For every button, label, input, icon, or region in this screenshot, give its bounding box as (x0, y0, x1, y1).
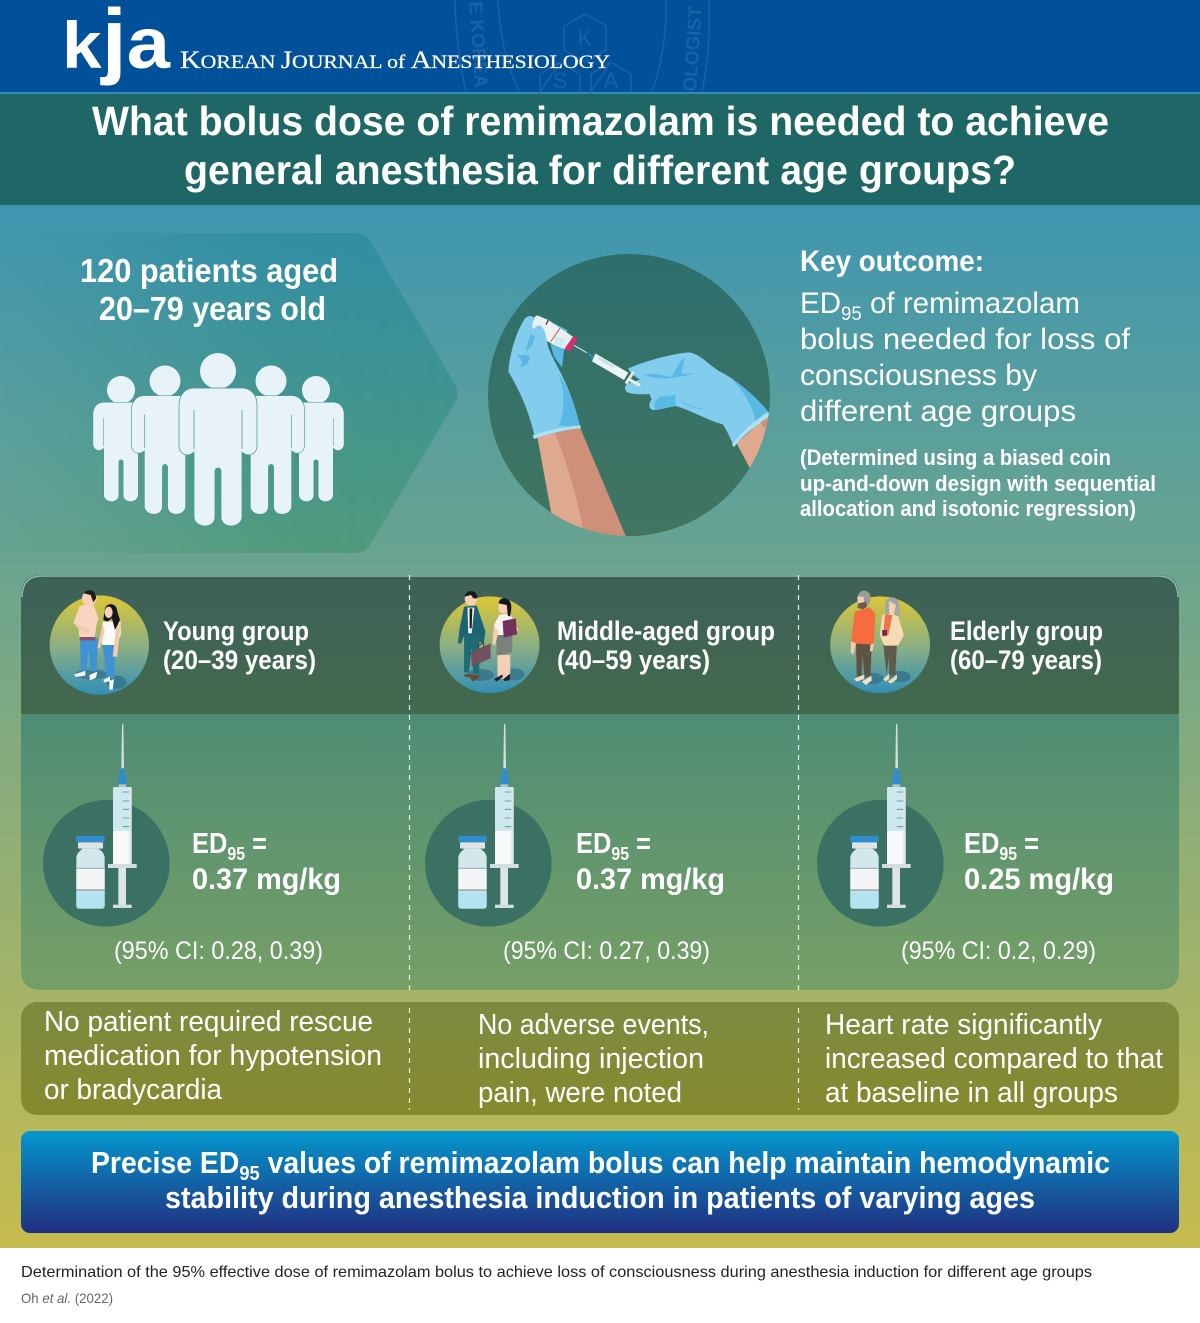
elderly group label (950, 616, 1103, 675)
dose value: ED (576, 828, 616, 860)
icon: vial and syringe (817, 723, 944, 927)
outcome description: of remimazolam (862, 287, 1080, 320)
right forearm (736, 414, 769, 468)
text block: key outcome (800, 245, 1156, 521)
elderly group result (817, 723, 1114, 965)
back fingers of left hand (551, 323, 567, 367)
middle-aged group label: Middle-aged group (557, 616, 775, 646)
middle-aged group header (440, 591, 775, 693)
dose value (964, 828, 1114, 896)
left forearm (537, 427, 627, 538)
icon: group of people (93, 353, 344, 526)
patients text (80, 252, 338, 327)
outcome description: 95 (841, 304, 862, 325)
dose value (576, 828, 725, 896)
dose value: = (245, 828, 267, 860)
young group result (43, 723, 341, 965)
method note: allocation and isotonic regression) (800, 496, 1136, 521)
outcome description: bolus needed for loss of (800, 323, 1131, 356)
middle-aged group label (557, 616, 775, 675)
citation: Oh et al. (2022) (21, 1290, 113, 1306)
conclusion box: Precise ED (91, 1145, 253, 1180)
background gradient (0, 205, 1200, 1248)
patients text: 20–79 years old (99, 290, 326, 327)
dose value: = (1017, 828, 1039, 860)
outcome description: consciousness by (800, 359, 1037, 392)
finding: adverse events (478, 1009, 709, 1109)
patients text: 120 patients aged (80, 252, 338, 289)
finding: heart rate: increased compared to that (825, 1043, 1163, 1075)
title line two: general anesthesia for different age groups? (184, 147, 1016, 193)
society seal watermark (455, 0, 709, 93)
dose value: ED (964, 828, 1004, 860)
method note: up-and-down design with sequential (800, 471, 1156, 496)
footer (0, 1248, 1200, 1323)
footer caption: Determination of the 95% effective dose of remimazolam bolus to achieve loss of consciousness during anesthesia induction for different age groups (21, 1264, 1092, 1281)
dose value: 95 (611, 844, 629, 864)
panel: age group results (21, 575, 1179, 990)
society seal watermark: OLOGIST (680, 5, 707, 92)
dose value: 95 (999, 844, 1017, 864)
society seal watermark: E KOREA (464, 1, 491, 89)
outcome description: ED (800, 287, 842, 320)
icon: business couple (440, 591, 540, 693)
method note (800, 445, 1156, 521)
finding: rescue medication (44, 1006, 382, 1106)
dose value: 95 (227, 844, 245, 864)
dose value: 0.25 mg/kg (964, 863, 1114, 896)
young group label: (20–39 years) (163, 645, 316, 675)
society seal watermark: A (604, 68, 619, 93)
left glove (508, 316, 580, 437)
dose value: = (629, 828, 651, 860)
finding: rescue medication: or bradycardia (44, 1074, 223, 1106)
conclusion box (21, 1131, 1179, 1233)
icon: vial and syringe (43, 723, 170, 927)
outcome description: different age groups (800, 395, 1076, 428)
conclusion box: values of remimazolam bolus can help maintain hemodynamic (260, 1145, 1110, 1180)
panel: patient population arrow (82, 233, 458, 553)
society seal watermark: S (553, 68, 567, 93)
young group label (163, 616, 316, 675)
dose value (192, 828, 341, 896)
dose value: 0.37 mg/kg (576, 863, 725, 896)
elderly group label: (60–79 years) (950, 645, 1102, 675)
conclusion box: stability during anesthesia induction in patients of varying ages (165, 1180, 1035, 1215)
finding: heart rate (825, 1009, 1163, 1109)
young group header (50, 590, 316, 695)
outcome description (800, 287, 1131, 428)
confidence interval: (95% CI: 0.27, 0.39) (503, 937, 710, 965)
panel: safety findings (21, 1002, 1179, 1115)
right glove (625, 352, 769, 446)
finding: adverse events: including injection (478, 1043, 704, 1075)
icon: vial and syringe (425, 723, 552, 927)
finding: heart rate: Heart rate significantly (825, 1009, 1102, 1041)
finding: adverse events: No adverse events, (478, 1009, 709, 1041)
illustration: gloved hands filling syringe (488, 254, 773, 538)
vial (532, 315, 574, 349)
middle-aged group label: (40–59 years) (557, 645, 710, 675)
title line one: What bolus dose of remimazolam is needed to achieve (92, 98, 1109, 144)
elderly group header (830, 591, 1103, 693)
young group label: Young group (163, 616, 309, 646)
dose value: 0.37 mg/kg (192, 863, 341, 896)
finding: rescue medication: No patient required rescue (44, 1006, 373, 1038)
finding: adverse events: pain, were noted (478, 1077, 682, 1109)
key outcome heading: Key outcome: (800, 245, 984, 278)
middle-aged group result (425, 723, 725, 965)
society seal watermark: K (578, 26, 593, 51)
needle and syringe (574, 345, 587, 353)
finding: rescue medication: medication for hypotension (44, 1040, 382, 1072)
elderly group label: Elderly group (950, 616, 1103, 646)
icon: young couple (50, 590, 149, 695)
conclusion box: 95 (239, 1163, 260, 1185)
confidence interval: (95% CI: 0.28, 0.39) (114, 937, 323, 965)
journal header band (0, 0, 1200, 94)
confidence interval: (95% CI: 0.2, 0.29) (901, 937, 1096, 965)
finding: heart rate: at baseline in all groups (825, 1077, 1118, 1109)
dose value: ED (192, 828, 232, 860)
icon: elderly couple (830, 591, 930, 693)
journal name: KOREAN JOURNAL of ANESTHESIOLOGY (180, 47, 610, 74)
method note: (Determined using a biased coin (800, 445, 1111, 470)
title band (0, 94, 1200, 205)
